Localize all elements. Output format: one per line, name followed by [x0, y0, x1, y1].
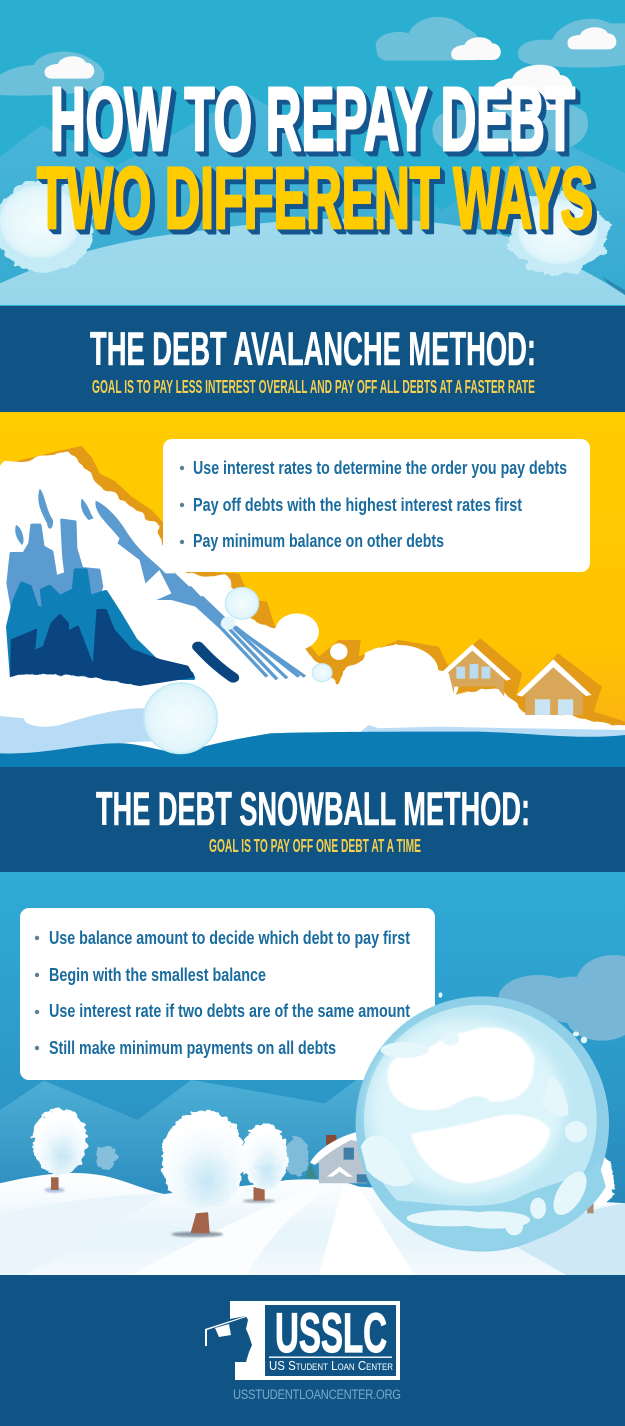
bullet text: Use interest rate if two debts are of the same amount — [49, 1000, 410, 1021]
small snowballs — [221, 587, 332, 682]
website: USSTUDENTLOANCENTER.ORG — [233, 1387, 401, 1402]
bullet text — [49, 927, 410, 1058]
right snowball — [508, 192, 625, 295]
bullets — [35, 936, 39, 1050]
bullet text: Pay minimum balance on other debts — [193, 530, 444, 551]
road — [319, 1187, 415, 1275]
foreground snow bank — [0, 675, 625, 757]
banner: snowball heading — [0, 767, 625, 872]
card: snowball points — [20, 908, 435, 1080]
house left — [442, 644, 511, 697]
panel: avalanche illustration — [0, 412, 625, 768]
ground snow — [0, 1173, 625, 1275]
bullet text: Use balance amount to decide which debt to pay first — [49, 927, 410, 948]
flying snow — [438, 992, 587, 1043]
left snowball — [0, 180, 94, 273]
tree: center right — [242, 1123, 288, 1203]
water band — [0, 732, 625, 768]
translucent clouds — [0, 17, 625, 150]
house — [305, 1132, 367, 1183]
tree: back right — [284, 1137, 310, 1177]
tree: far right — [585, 1158, 615, 1213]
tree: center — [161, 1111, 245, 1237]
logo — [205, 1301, 400, 1380]
bullet text: Begin with the smallest balance — [49, 964, 266, 985]
banner: avalanche heading — [0, 306, 625, 412]
mountain navy layer — [11, 610, 193, 685]
footer — [0, 1275, 625, 1426]
big snowball — [144, 683, 217, 754]
giant snowball — [356, 992, 609, 1252]
house right — [517, 659, 592, 715]
title — [37, 70, 593, 247]
avalanche lines — [189, 587, 305, 679]
back cloud — [498, 955, 625, 1041]
right hill — [510, 1203, 625, 1275]
panel: snowball illustration — [0, 872, 625, 1275]
header illustration — [0, 0, 625, 306]
snow puffs — [191, 592, 458, 703]
background mountains — [0, 1077, 438, 1200]
white clouds — [45, 27, 616, 110]
snow slope — [0, 219, 625, 305]
mountain streaks — [15, 488, 223, 627]
mountain mid blue layer — [8, 570, 193, 678]
mountain light blue layer — [8, 520, 102, 607]
pale snow — [0, 708, 151, 753]
bullets — [180, 466, 184, 544]
graduation cap — [205, 1314, 252, 1346]
bullet text — [193, 457, 567, 551]
navy blob — [198, 647, 233, 678]
snowball highlights — [387, 1027, 550, 1183]
logo: USSLC — [275, 1301, 387, 1364]
logo: US Student Loan Center — [269, 1358, 393, 1373]
card: avalanche points — [163, 439, 590, 572]
bullet text: Still make minimum payments on all debts — [49, 1037, 336, 1058]
left hill shading — [0, 1194, 164, 1275]
banner: snowball heading: GOAL IS TO PAY OFF ONE DEBT AT A TIME — [209, 836, 421, 856]
background mountains — [0, 93, 625, 305]
orange mountain shadow — [14, 446, 625, 737]
tree: small back — [94, 1146, 117, 1169]
bullet text: Pay off debts with the highest interest rates first — [193, 494, 522, 515]
tree: far left — [33, 1108, 87, 1193]
mountain snow — [0, 452, 625, 757]
